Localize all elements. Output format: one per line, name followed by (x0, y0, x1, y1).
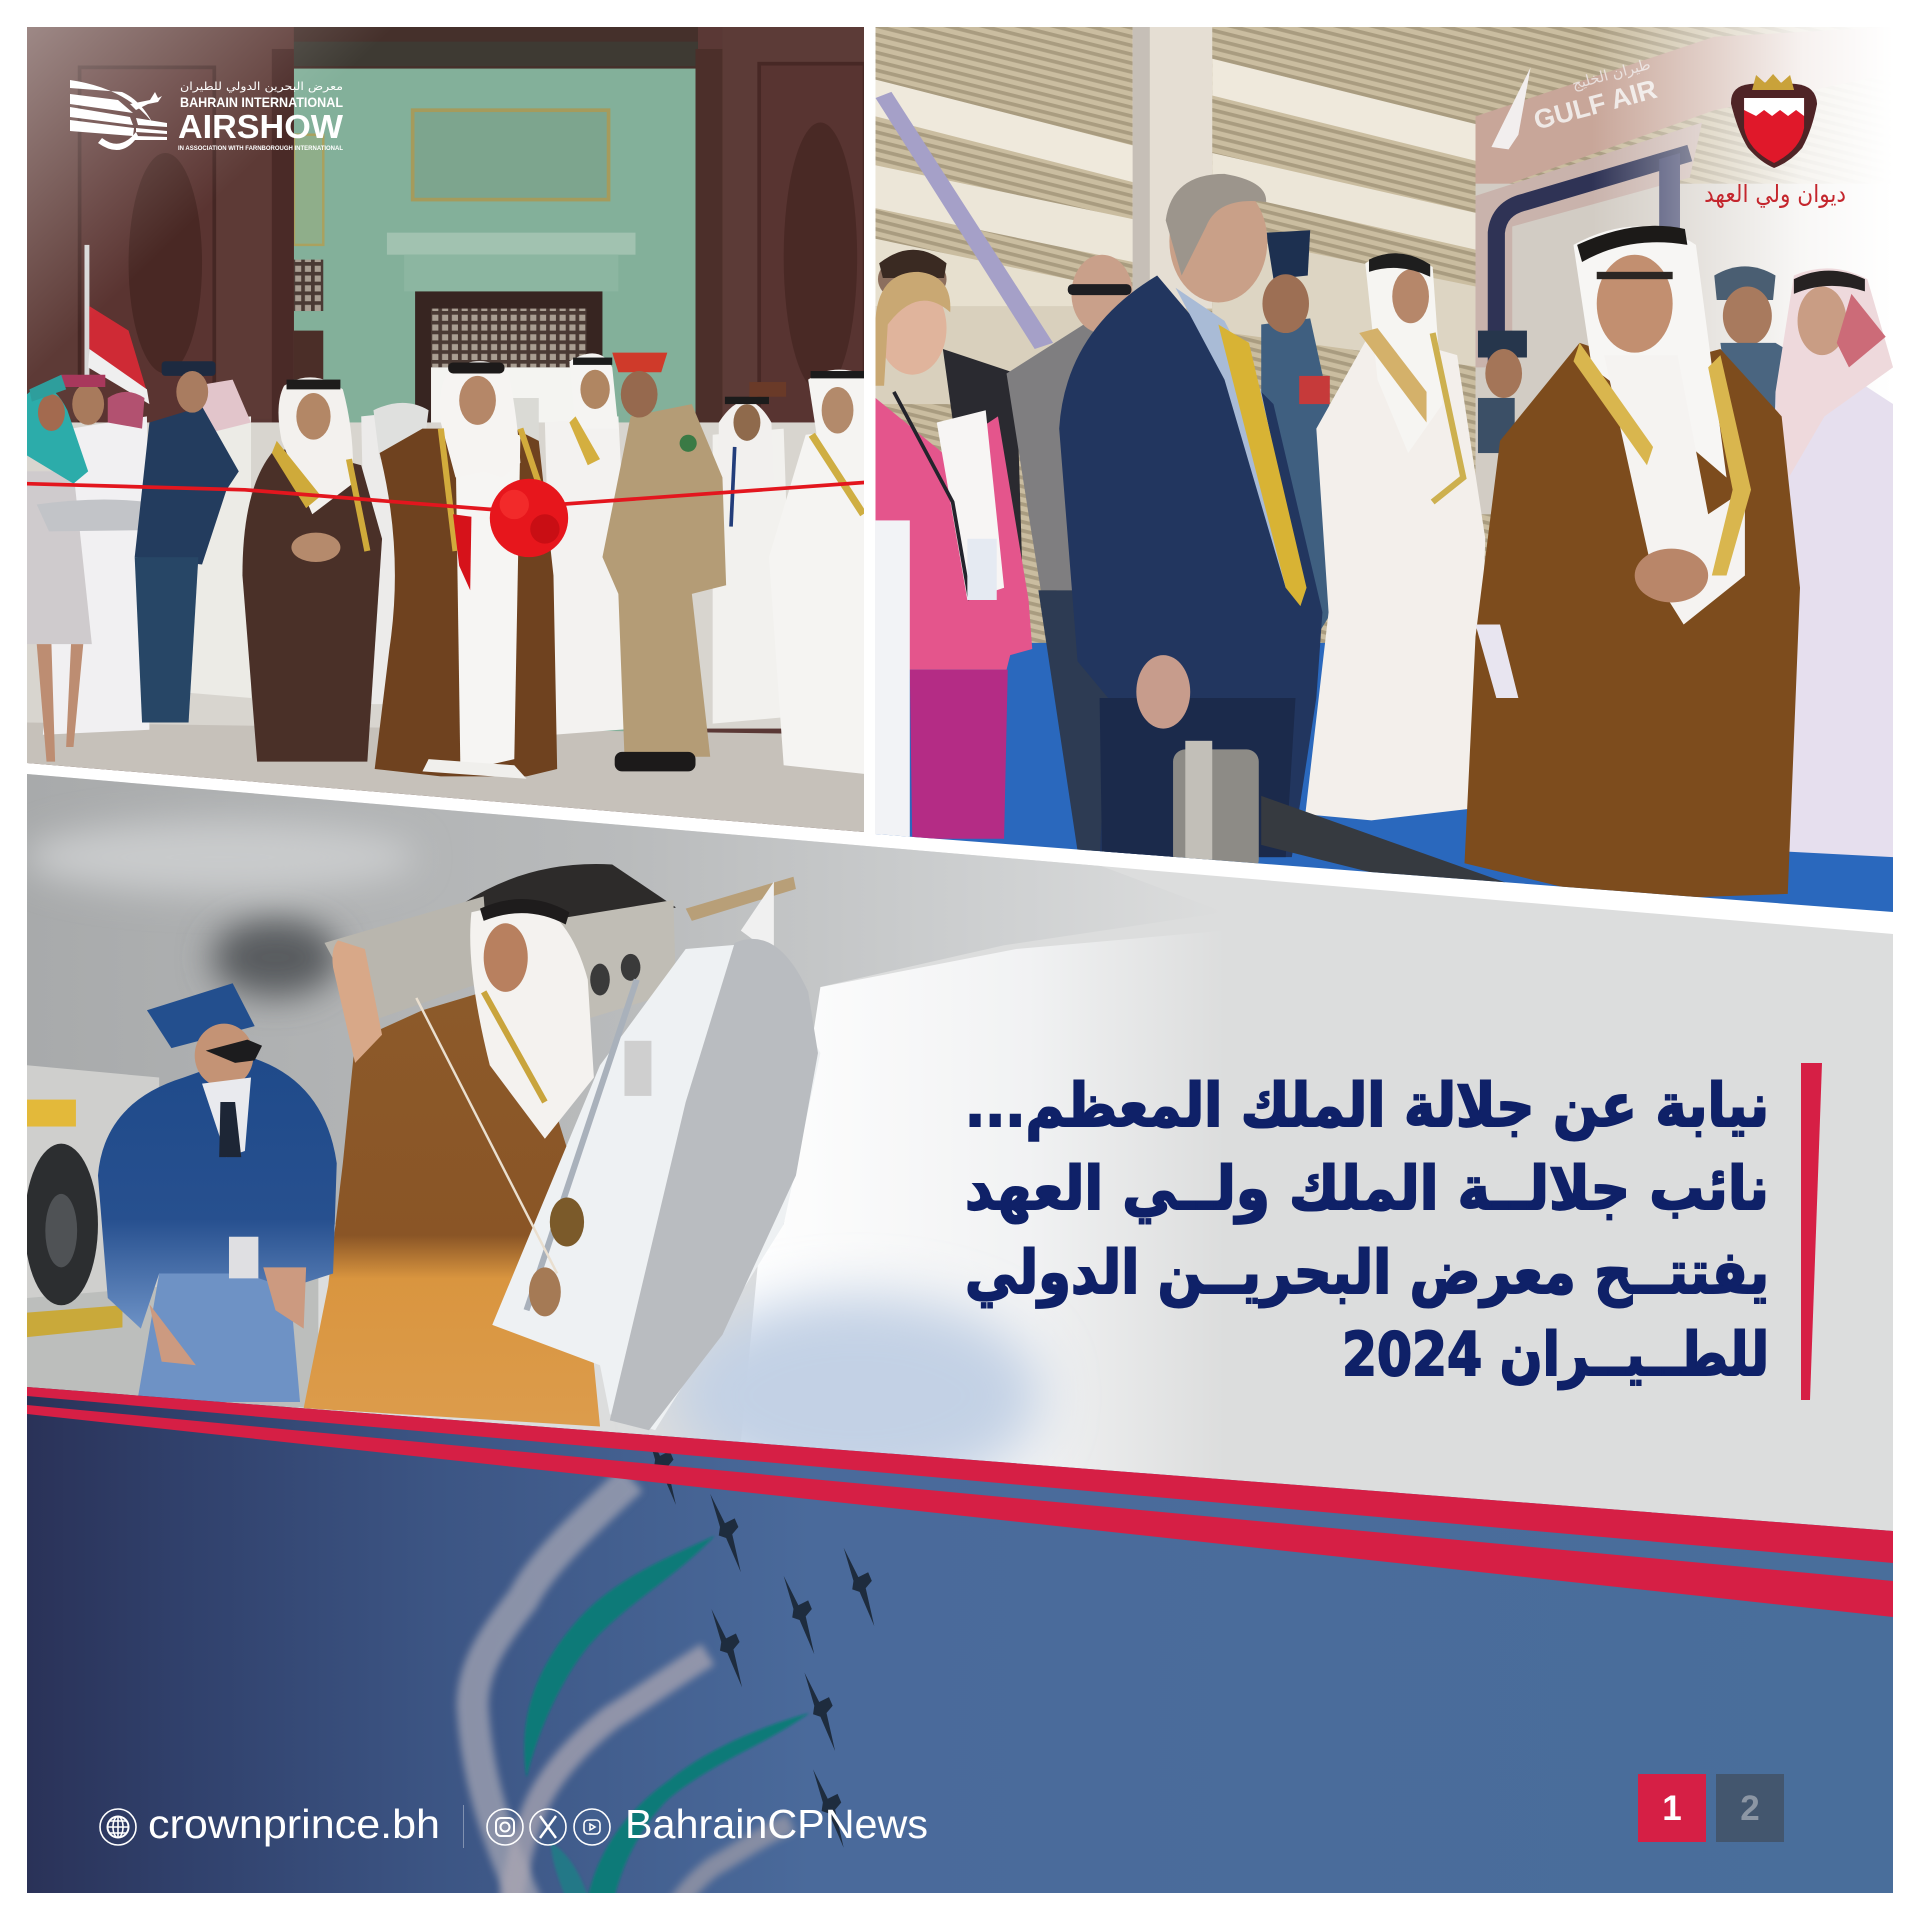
logo English name: BAHRAIN INTERNATIONAL (180, 94, 343, 110)
red ribbon and bow (27, 479, 864, 590)
footer website (100, 1801, 440, 1847)
icon: globe (100, 1809, 136, 1845)
photo: ribbon cutting ceremony (27, 27, 864, 845)
crown (1752, 74, 1794, 90)
headline line 1: نيابة عن جلالة الملك المعظم... (965, 1071, 1769, 1141)
headline line 2: نائب جلالــة الملك ولــي العهد (965, 1154, 1769, 1224)
panel: sky background with aerobatic team (27, 1380, 1893, 1910)
wooden doors (78, 27, 864, 422)
officer in cap right (1714, 266, 1806, 416)
shield (1744, 98, 1804, 163)
crowd backdrop (27, 422, 864, 729)
man behind in dark suit (878, 250, 1022, 576)
logo AIRSHOW wordmark: AIRSHOW (178, 108, 344, 145)
wheel (24, 1100, 122, 1337)
headline line 4: للطــيــران 2024 (1342, 1320, 1769, 1390)
air force officer (98, 983, 337, 1402)
photo: Gulf Air pavilion tour (874, 27, 1894, 931)
Gulf Air sign and portal: GULF AIR (1531, 74, 1660, 136)
flag (84, 245, 149, 404)
logo: Bahrain International Airshow (70, 80, 344, 152)
red diagonal stripes (27, 1387, 1893, 1617)
man in navy suit with yellow tie (1059, 174, 1322, 857)
guests behind (43, 375, 539, 735)
crown prince in brown bisht (1464, 226, 1800, 900)
blue carpet floor (876, 643, 1893, 931)
Gulf Air sign and portal: طيران الخليج (1570, 56, 1652, 93)
formation jets (645, 1427, 874, 1848)
air force officer behind (1261, 230, 1353, 784)
icon: X (530, 1809, 566, 1845)
blue uniform officer (135, 361, 239, 722)
icon: YouTube (574, 1809, 610, 1845)
grey suit man (1007, 255, 1133, 851)
social handle text: BahrainCPNews (625, 1801, 928, 1847)
open hatch (324, 864, 796, 1006)
white robed attendant with lanyard (713, 382, 793, 724)
crest mantling (1731, 82, 1817, 168)
green hall interior (291, 27, 698, 753)
court name: ديوان ولي العهد (1704, 180, 1846, 208)
smoke trails (473, 1479, 809, 1910)
white robed man behind right (545, 353, 624, 734)
aircraft door flap (416, 939, 820, 1430)
floor (27, 722, 864, 832)
stewardess (27, 374, 141, 762)
icon: instagram (487, 1809, 523, 1845)
footer social handle (487, 1801, 928, 1847)
crest: Crown Prince Court (1704, 74, 1846, 208)
photo: aircraft inspection (27, 774, 1153, 1474)
man with red and white scarf (1769, 268, 1893, 857)
page indicator 2 (1716, 1774, 1784, 1842)
khaki uniform general (602, 353, 726, 771)
exhibition ceiling (876, 27, 1894, 664)
website address: crownprince.bh (148, 1801, 440, 1847)
logo mark: aircraft arc (70, 80, 167, 150)
man in brown bisht (304, 899, 600, 1427)
headline (965, 1071, 1769, 1390)
page indicator 1: 1 (1662, 1789, 1682, 1828)
headline line 3: يفتتــح معرض البحريــن الدولي (965, 1238, 1769, 1308)
accent bar (1801, 1063, 1822, 1400)
crown prince with ribbon (375, 361, 557, 779)
panel: grey title background (27, 774, 1893, 1560)
page indicator 2: 2 (1740, 1789, 1760, 1828)
logo Arabic name: معرض البحرين الدولي للطيران (180, 80, 343, 93)
rightmost white robed man (780, 370, 864, 774)
woman in pink suit (874, 272, 1032, 839)
stanchion and belt (1173, 741, 1531, 912)
officer in cap behind (1478, 331, 1527, 453)
white robed man (1305, 253, 1485, 820)
Gulf Air sign and portal (1476, 27, 1893, 514)
man in dark bisht (242, 377, 382, 762)
logo tagline: IN ASSOCIATION WITH FARNBOROUGH INTERNATIONAL (178, 145, 343, 152)
page indicator 1 (1638, 1774, 1706, 1842)
